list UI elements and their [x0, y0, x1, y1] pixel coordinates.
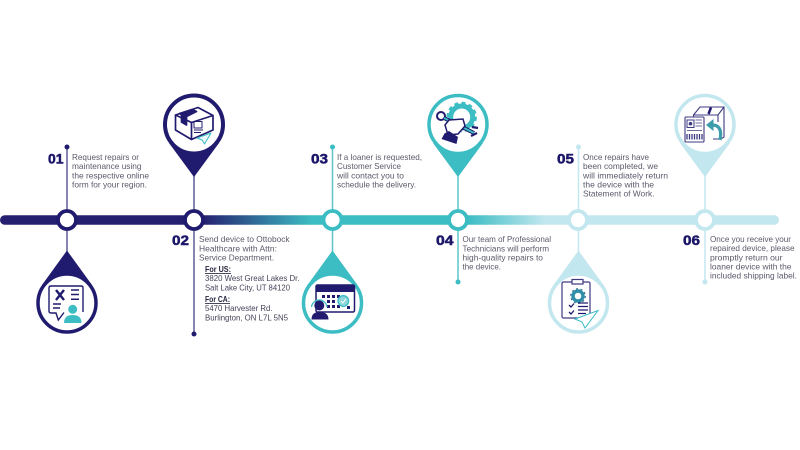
step 02 pin with parcel icon: [165, 96, 223, 177]
step 01 description: form for your region.: [72, 180, 147, 190]
step 06 description: repaired device, please: [710, 243, 795, 253]
icon: chat form with tools and person: [49, 286, 83, 323]
step 04 description: high-quality repairs to: [462, 252, 543, 262]
Canada address: [205, 294, 288, 322]
Canada address: Burlington, ON L7L 5N5: [205, 312, 288, 322]
step 06 pin with return parcel icon: [676, 96, 734, 177]
step 02 description: Send device to Ottobock: [199, 234, 290, 244]
step 05 description: the device with the: [583, 180, 654, 190]
step 02 description: [199, 234, 290, 262]
step number 04: 04: [436, 233, 454, 248]
step 01 pin with support icon: [38, 250, 96, 332]
step 05 description: Statement of Work.: [583, 188, 654, 198]
step 02 description: Healthcare with Attn:: [199, 243, 277, 253]
step 01 description: maintenance using: [72, 161, 142, 171]
timeline node 3: [324, 211, 342, 229]
step 03 description: schedule the delivery.: [337, 180, 416, 190]
icon: return parcel with arrow: [685, 107, 724, 142]
step 02 text: [172, 233, 300, 322]
timeline node 6: [696, 211, 714, 229]
step 04 description: the device.: [462, 262, 501, 272]
step 01 description: [72, 152, 149, 190]
step 05 description: Once repairs have: [583, 152, 649, 162]
Canada address: 5470 Harvester Rd.: [205, 303, 272, 313]
US address: [205, 264, 300, 292]
step 06 description: promptly return our: [710, 252, 783, 262]
step 04 text: [436, 233, 551, 272]
step 05 description: [582, 152, 668, 198]
step number 01: 01: [48, 152, 64, 166]
timeline node 2: [185, 211, 203, 229]
connector lines: [64, 144, 708, 336]
step 05 description: will immediately return: [582, 170, 668, 180]
step 03 description: Customer Service: [337, 161, 401, 171]
step 04 description: Our team of Professional: [462, 234, 551, 244]
step 06 description: loaner device with the: [710, 262, 792, 272]
timeline bar: [0, 215, 779, 225]
step 01 description: Request repairs or: [72, 152, 139, 162]
step number 02: 02: [172, 233, 189, 248]
timeline node 5: [569, 211, 587, 229]
step 04 description: Technicians will perform: [462, 244, 549, 254]
step 01 description: the respective online: [72, 170, 149, 180]
timeline node 4: [449, 211, 467, 229]
step 04 description: [462, 234, 551, 272]
US address: Salt Lake City, UT 84120: [205, 282, 290, 292]
step 06 text: [683, 233, 797, 280]
step 03 pin with calendar icon: [304, 250, 362, 332]
step number 05: 05: [557, 152, 575, 166]
step 06 description: Once you receive your: [710, 234, 791, 244]
icon: hand gripping wrench with gear: [437, 103, 478, 144]
step 06 description: [710, 234, 797, 280]
icon: calendar with headset agent: [312, 285, 354, 320]
timeline node 1: [58, 211, 76, 229]
step 01 text: [48, 152, 149, 190]
step number 03: 03: [311, 152, 329, 166]
step 03 text: [311, 152, 422, 190]
step 03 description: will contact you to: [336, 170, 404, 180]
step 05 text: [557, 152, 668, 198]
step number 06: 06: [683, 233, 701, 248]
step 02 description: Service Department.: [199, 252, 274, 262]
step 04 pin with hand and tools icon: [429, 96, 487, 177]
icon: clipboard with gear and paper plane: [562, 280, 598, 328]
icon: parcel box with paper plane: [176, 108, 213, 144]
step 03 description: [336, 152, 422, 190]
step 03 description: If a loaner is requested,: [337, 152, 422, 162]
US address: For US:: [205, 264, 231, 274]
step 05 pin with clipboard icon: [550, 250, 608, 332]
US address: 3820 West Great Lakes Dr.: [205, 273, 300, 283]
Canada address: For CA:: [205, 294, 230, 304]
step 05 description: been completed, we: [583, 161, 658, 171]
step 06 description: included shipping label.: [710, 270, 797, 280]
